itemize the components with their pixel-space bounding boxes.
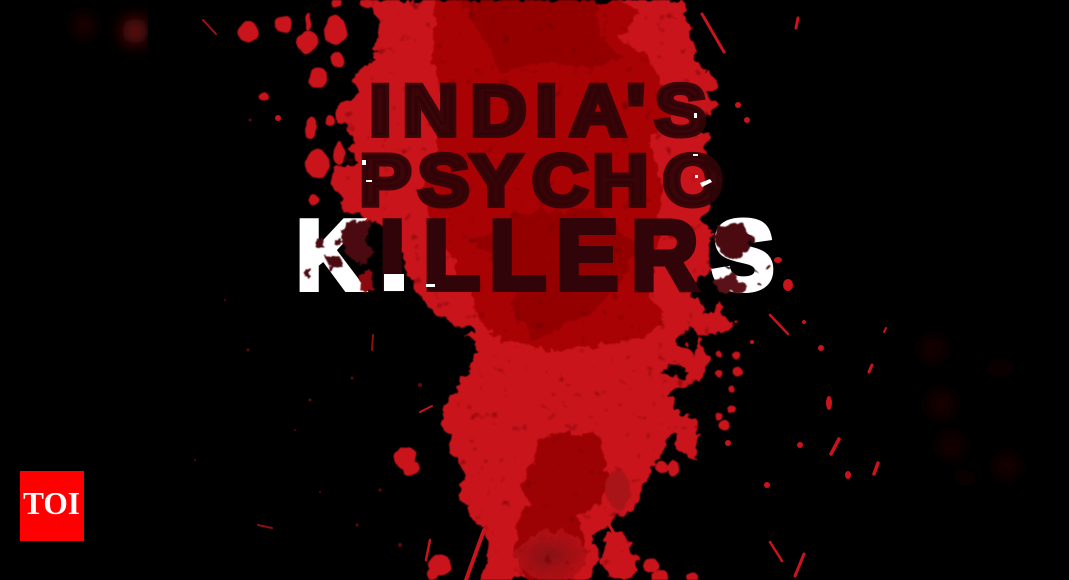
title: India's Psycho Killers bbox=[296, 71, 774, 311]
splatter: darkest centre bbox=[460, 0, 640, 340]
splatter: lower bright mass bbox=[442, 330, 696, 580]
splatter: dark centre bbox=[420, 0, 672, 350]
tiny droplets bbox=[275, 102, 851, 488]
title line: KILLERS: KILLERS bbox=[296, 201, 774, 311]
logo text: TOI bbox=[23, 485, 80, 521]
faint specks bbox=[194, 118, 422, 547]
splatter: right wing lobes bbox=[600, 296, 734, 578]
title line: PSYCHO: PSYCHO bbox=[360, 141, 723, 220]
bokeh: bottom right glow bbox=[922, 338, 1018, 486]
small droplets and streaks bbox=[194, 14, 886, 580]
title line: INDIA'S: INDIA'S bbox=[370, 71, 706, 150]
splatter: dark cut-outs bbox=[340, 0, 716, 522]
droplets bbox=[238, 0, 743, 580]
splatter: lower dark blob bbox=[514, 432, 610, 580]
splatter marks over white letters bbox=[304, 220, 772, 294]
white flecks bbox=[362, 113, 712, 291]
logo: TOI bbox=[20, 471, 84, 541]
splatter: upper bright mass bbox=[332, 0, 728, 352]
streaks bbox=[203, 14, 886, 580]
bokeh: top left glow bbox=[74, 16, 148, 44]
splatter: bottom pale patch bbox=[518, 530, 586, 580]
logo background bbox=[20, 471, 84, 541]
blood splatter bbox=[332, 0, 734, 580]
